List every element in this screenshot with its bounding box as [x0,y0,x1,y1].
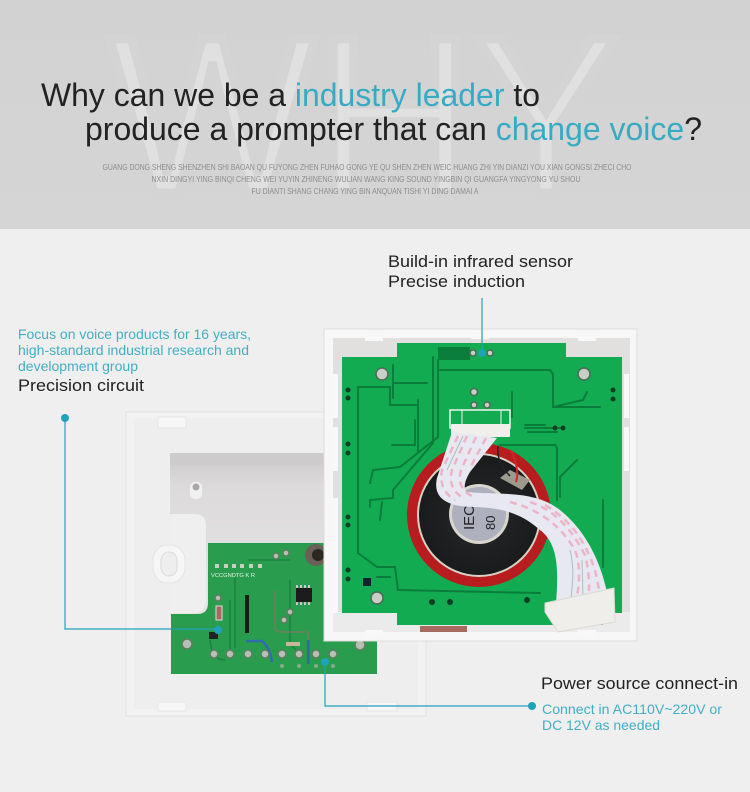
subtitle small text: GUANG DONG SHENG SHENZHEN SHI BAOAN QU FUYONG ZHEN FUHAO GONG YE QU SHEN ZHEN WEIC HUANG ZHI YIN DIANZI YOU XIAN GONGSI ZHECI CHO [102,162,632,172]
callout: precision circuit: Focus on voice products for 16 years, [18,326,251,342]
white plug [545,588,615,632]
inductor [305,544,327,566]
subtitle small text: FU DIANTI SHANG CHANG YING BIN ANQUAN TISHI YI DING DAMAI A [252,186,479,196]
title: Why can we be a industry leader to [41,77,540,113]
callout: power source: DC 12V as needed [542,717,660,733]
vias [346,388,616,605]
connector socket on board [450,410,510,437]
speaker [407,443,551,587]
callout: precision circuit: high-standard industrial research and [18,342,249,358]
callout: power source: Connect in AC110V~220V or [542,701,722,717]
connector line [478,298,486,357]
subtitle small text [102,162,632,196]
header band [0,0,750,241]
speaker: 80 [483,516,498,530]
back case with lower circuit board [126,412,426,716]
callout: precision circuit [18,326,251,634]
callout: infrared sensor: Build-in infrared sensor [388,252,573,271]
speaker: IEC [461,505,478,530]
callout: infrared sensor [388,252,573,357]
mounting tab [170,514,206,613]
silkscreen: VCCGNDTG K R [211,573,255,579]
connector line [321,658,536,710]
subtitle small text: NXIN DINGYI YING BINQI CHENG WEI YUYIN ZHINENG WULIAN WANG KING SOUND YINGBIN QI GUANGFA YINGYONG YU SHOU [152,174,580,184]
callout: precision circuit: development group [18,358,138,374]
bottom connector strip [420,626,467,632]
dark strip components [245,595,249,633]
chip [296,585,312,605]
callout: power source [321,658,738,733]
body background [0,229,750,792]
solder pads [182,550,365,658]
oblong hole [153,545,185,583]
traces [358,357,603,593]
screws [371,350,590,604]
lower board [171,543,377,674]
clips [158,417,186,428]
callout: infrared sensor: Precise induction [388,272,525,291]
front case with upper circuit board [324,329,637,641]
title [41,77,702,147]
callout: precision circuit: Precision circuit [18,376,144,395]
upper circuit board [342,343,622,625]
inner well [170,453,326,614]
ribbon cable [436,432,607,604]
title: produce a prompter that can change voice? [85,111,702,147]
connector line [61,414,222,634]
side slots [333,331,629,637]
callout: power source: Power source connect-in [541,674,738,693]
post [190,482,202,499]
